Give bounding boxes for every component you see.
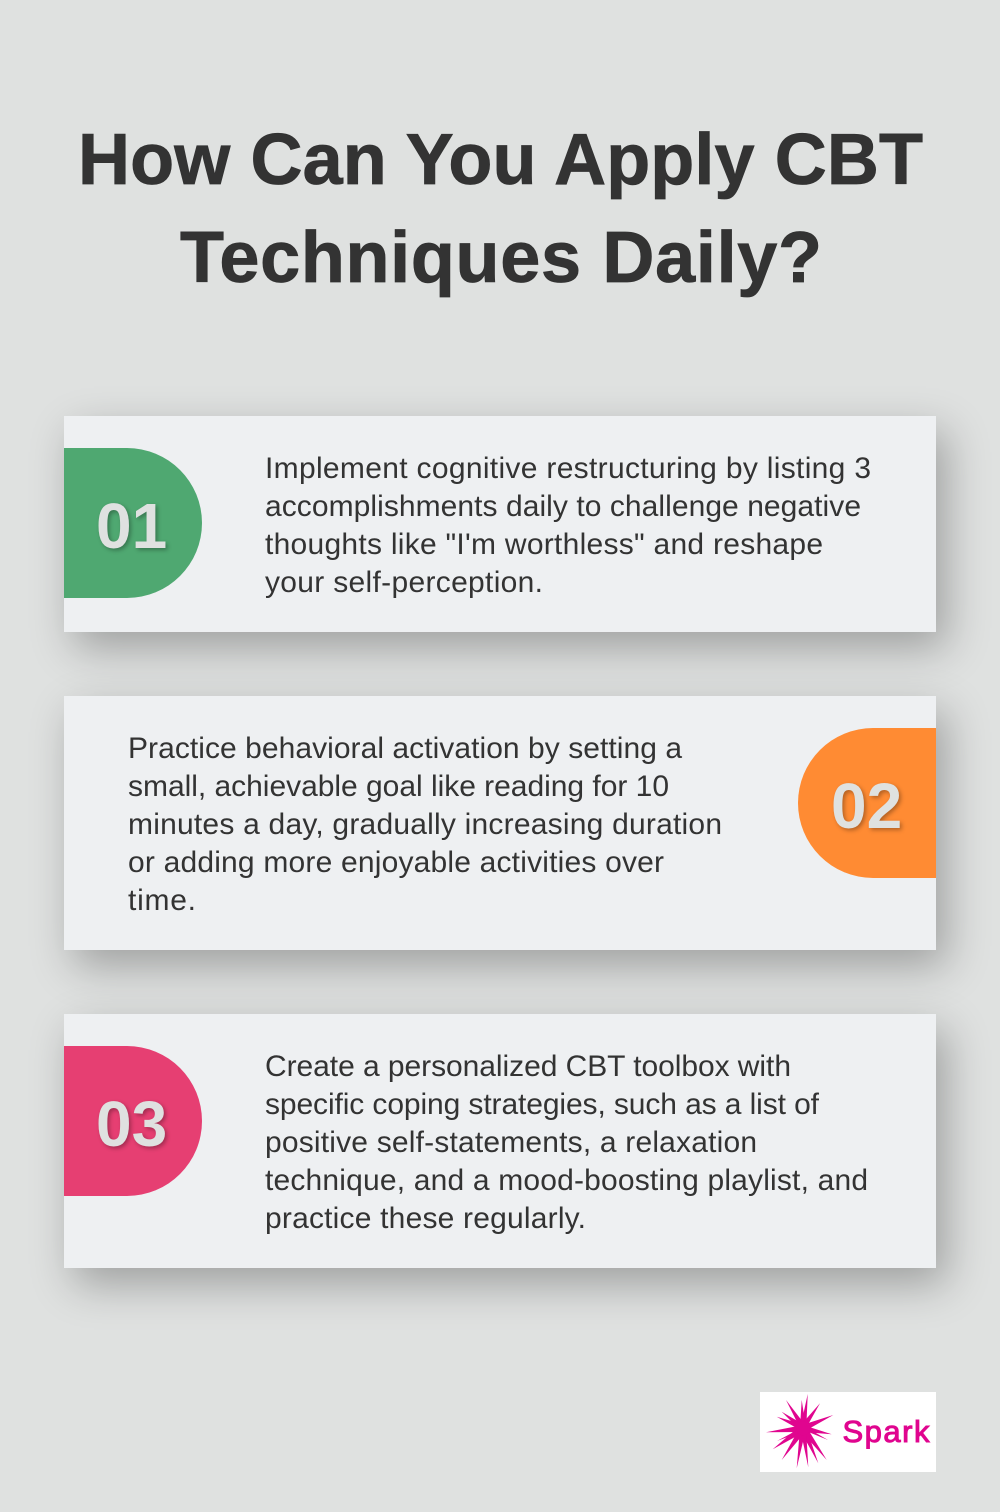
panel: step 01 [64,416,936,632]
text: step 02 description: or adding more enjoyable activities over [128,846,664,879]
text: step 03 description: positive self-statements, a relaxation [265,1126,757,1159]
logo: Spark [760,1392,936,1472]
text: step 02 description: minutes a day, gradually increasing duration [128,808,722,841]
panel: step 02 [64,696,936,950]
badge: 01 [64,448,202,598]
title: Techniques Daily? [180,218,822,298]
number 02: 02 [831,770,902,842]
text: step 01 description: your self-perception. [265,566,543,599]
text: step 01 description: Implement cognitive restructuring by listing 3 [265,452,871,485]
text: step 02 description: time. [128,884,196,917]
number 03: 03 [96,1088,167,1160]
text: step 03 description [265,1050,868,1235]
text: step 03 description: Create a personalized CBT toolbox with [265,1050,791,1083]
number 01: 01 [96,490,167,562]
text: step 02 description: small, achievable goal like reading for 10 [128,770,669,803]
text: step 01 description: thoughts like "I'm worthless" and reshape [265,528,823,561]
title [78,120,923,298]
badge: 03 [64,1046,202,1196]
logo wordmark: Spark [842,1414,930,1449]
text: step 01 description: accomplishments daily to challenge negative [265,490,861,523]
text: step 01 description [265,452,871,599]
text: step 02 description [128,732,722,917]
text: step 03 description: technique, and a mood-boosting playlist, and [265,1164,868,1197]
title: How Can You Apply CBT [78,120,923,200]
badge: 02 [798,728,936,878]
text: step 03 description: specific coping strategies, such as a list of [265,1088,820,1121]
icon: starburst [766,1394,833,1468]
text: step 03 description: practice these regularly. [265,1202,586,1235]
text: step 02 description: Practice behavioral activation by setting a [128,732,682,765]
panel: step 03 [64,1014,936,1268]
